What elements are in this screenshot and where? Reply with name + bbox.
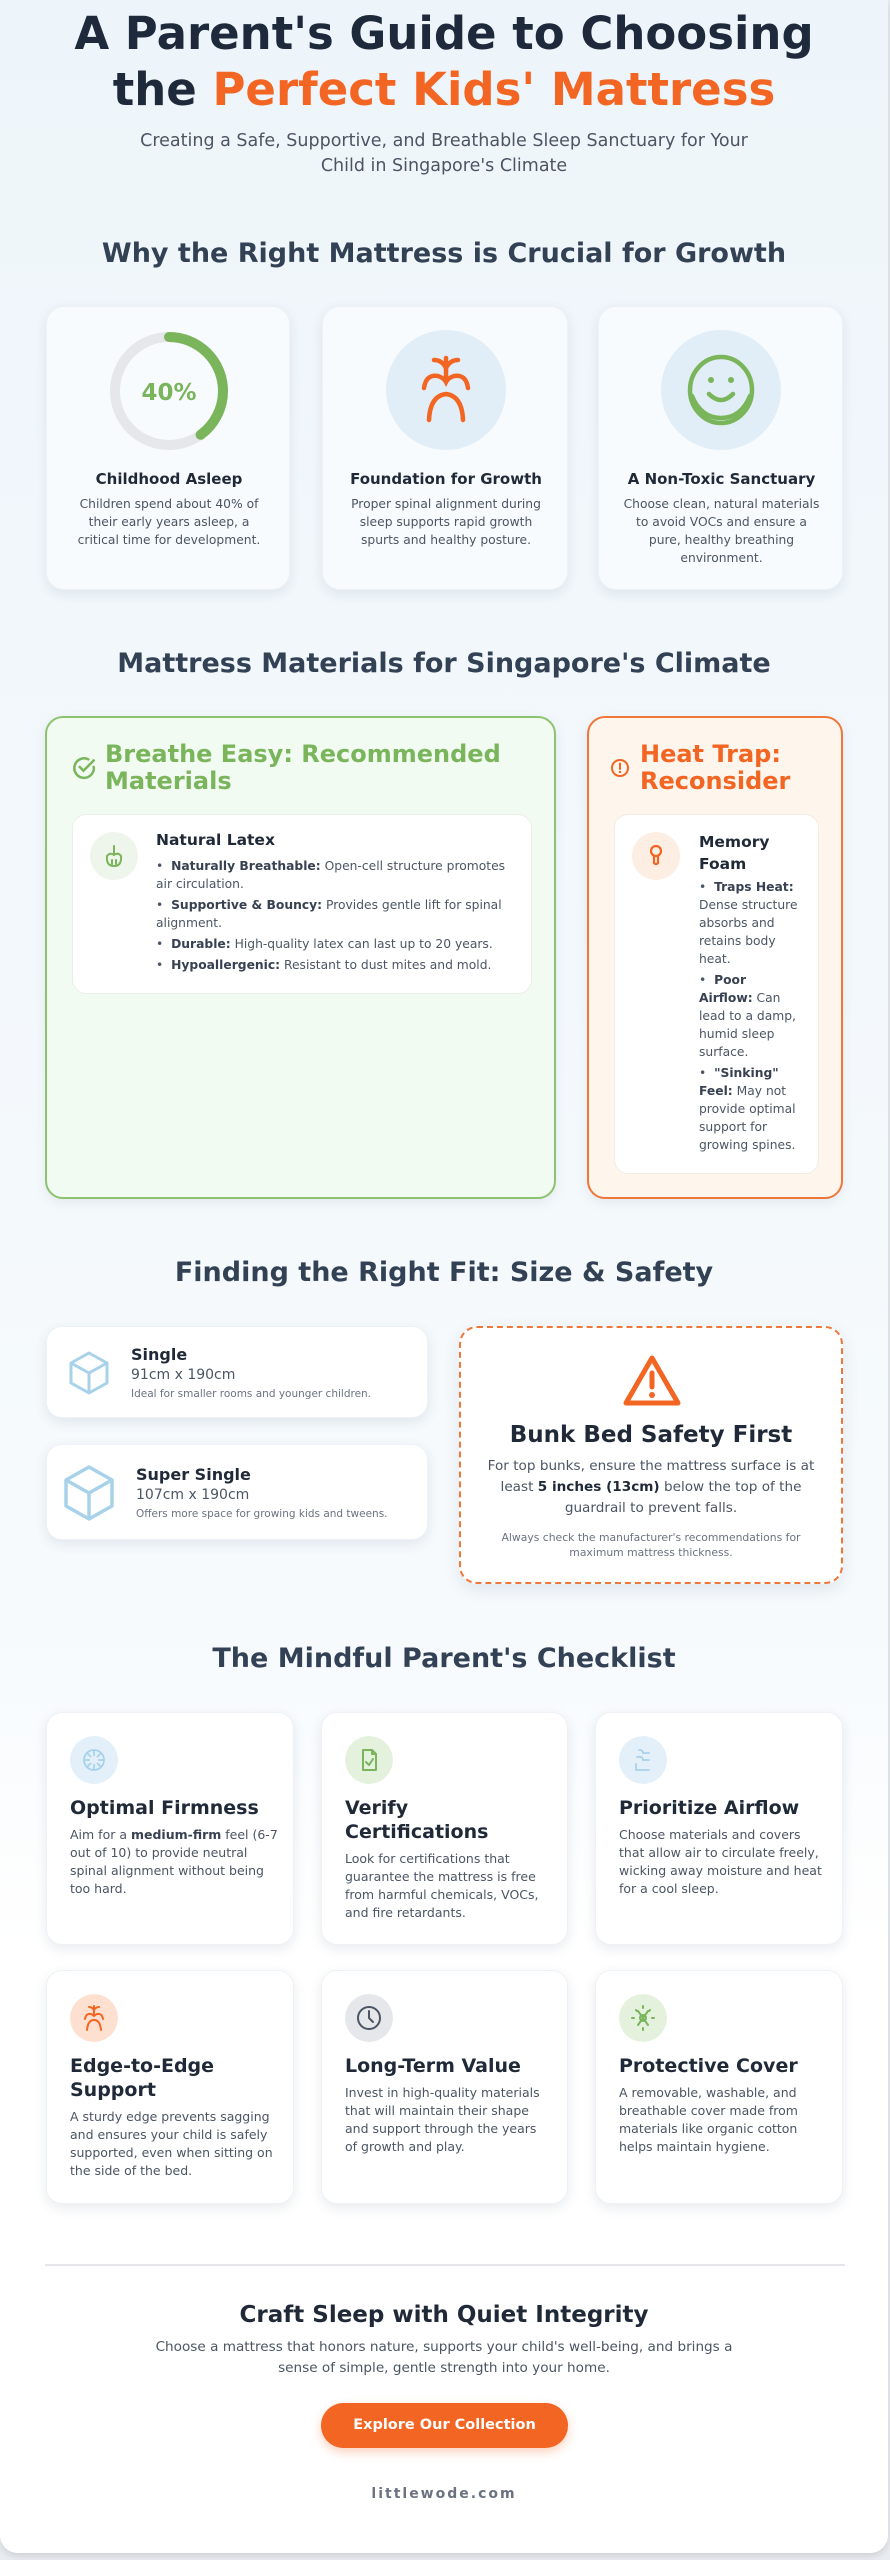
checklist card: airflow — [595, 1712, 843, 1945]
checklist text — [70, 2055, 273, 2178]
bullet list — [156, 859, 505, 972]
callout text: For top bunks, ensure the mattress surface is at least 5 inches (13cm) below the top of the guardrail to prevent falls. — [488, 1458, 814, 1516]
bullet list: • Hypoallergenic: Resistant to dust mites and mold. — [156, 958, 491, 972]
panel heading: Breathe Easy: Recommended Materials — [105, 740, 501, 795]
icon: cube large — [64, 1465, 114, 1521]
size desc: Offers more space for growing kids and tweens. — [136, 1508, 388, 1520]
icon: cube — [70, 1352, 108, 1394]
subtitle: Creating a Safe, Supportive, and Breathable Sleep Sanctuary for Your Child in Singapore's Climate — [140, 131, 748, 176]
icon: check circle — [73, 757, 96, 780]
checklist text: Protective Cover — [619, 2055, 798, 2077]
bullet list: • Supportive & Bouncy: Provides gentle lift for spinal alignment. — [156, 898, 502, 930]
icon: spine small — [70, 1994, 118, 2042]
checklist text: Aim for a medium-firm feel (6-7 out of 10) to provide neutral spinal alignment without being too hard. — [70, 1827, 278, 1896]
bullet list: • Traps Heat: Dense structure absorbs and retains body heat. — [699, 880, 798, 966]
icon: cover — [619, 1994, 667, 2042]
checklist text: A removable, washable, and breathable cover made from materials like organic cotton helps maintain hygiene. — [619, 2085, 798, 2154]
material name: Memory Foam — [699, 833, 769, 873]
title: the Perfect Kids' Mattress — [113, 63, 775, 116]
icon: alert circle — [611, 759, 629, 777]
icon: memory foam — [632, 832, 680, 880]
callout note: Always check the manufacturer's recommendations for maximum mattress thickness. — [502, 1531, 800, 1559]
size desc: Ideal for smaller rooms and younger children. — [131, 1388, 371, 1400]
panel: recommended materials — [45, 716, 556, 1199]
footer heading: Craft Sleep with Quiet Integrity — [240, 2302, 648, 2328]
card title: Foundation for Growth — [350, 470, 542, 488]
bullet list: • Naturally Breathable: Open-cell structure promotes air circulation. — [156, 859, 505, 891]
chart: 40% ring — [110, 332, 228, 450]
panel: non-toxic sanctuary — [598, 306, 843, 590]
size card: super single — [46, 1444, 428, 1540]
material card: natural latex — [72, 814, 532, 994]
footer text: Choose a mattress that honors nature, supports your child's well-being, and brings a sense of simple, gentle strength into your home. — [156, 2339, 732, 2376]
checklist text — [619, 2055, 798, 2154]
button: explore collection — [321, 2403, 568, 2448]
panel: heat trap — [587, 716, 843, 1199]
bullet list — [699, 880, 798, 1152]
bullet list: • Poor Airflow: Can lead to a damp, humid sleep surface. — [699, 973, 796, 1059]
icon: spine — [386, 330, 506, 450]
chart: 40% ring: 40% — [141, 380, 197, 406]
button: explore collection: Explore Our Collection — [353, 2417, 536, 2433]
checklist text: Prioritize Airflow — [619, 1797, 799, 1819]
checklist text: A sturdy edge prevents sagging and ensures your child is safely supported, even when sitting on the side of the bed. — [70, 2109, 273, 2178]
bullet list: • Durable: High-quality latex can last up to 20 years. — [156, 937, 493, 951]
checklist card: certifications — [321, 1712, 568, 1945]
checklist card: protective cover — [595, 1970, 843, 2204]
icon: clock — [345, 1994, 393, 2042]
size card: single — [46, 1326, 428, 1418]
heading: size & safety: Finding the Right Fit: Size & Safety — [175, 1257, 713, 1288]
checklist text: Optimal Firmness — [70, 1797, 259, 1819]
size title: Single — [131, 1345, 187, 1364]
card text: Choose clean, natural materials to avoid VOCs and ensure a pure, healthy breathing environment. — [624, 497, 819, 565]
heading: materials: Mattress Materials for Singapore's Climate — [117, 648, 771, 679]
icon: document check — [345, 1736, 393, 1784]
checklist text: Invest in high-quality materials that will maintain their shape and support through the years of growth and play. — [345, 2085, 540, 2154]
size dims: 107cm x 190cm — [136, 1487, 249, 1503]
checklist text: Look for certifications that guarantee the mattress is free from harmful chemicals, VOCs, and fire retardants. — [345, 1851, 538, 1920]
panel: childhood asleep — [46, 306, 290, 590]
material name: Natural Latex — [156, 831, 275, 849]
section: checklist background — [0, 1617, 888, 2553]
size title: Super Single — [136, 1465, 251, 1484]
checklist text: Edge-to-Edge Support — [70, 2055, 214, 2101]
checklist text — [619, 1797, 822, 1896]
checklist text: Choose materials and covers that allow air to circulate freely, wicking away moisture and heat for a cool sleep. — [619, 1827, 822, 1896]
card title: Childhood Asleep — [96, 470, 242, 488]
icon: smiley — [661, 330, 781, 450]
checklist text: Long-Term Value — [345, 2055, 521, 2077]
heading: why: Why the Right Mattress is Crucial for Growth — [102, 238, 786, 269]
checklist text — [70, 1797, 278, 1896]
panel: foundation for growth — [322, 306, 568, 590]
footer brand: littlewode.com — [371, 2486, 517, 2502]
heading: checklist: The Mindful Parent's Checklist — [212, 1643, 676, 1674]
checklist card: edge support — [46, 1970, 294, 2204]
callout title: Bunk Bed Safety First — [510, 1422, 792, 1448]
checklist card: optimal firmness — [46, 1712, 294, 1945]
panel heading: Heat Trap: Reconsider — [640, 740, 790, 795]
icon: latex — [90, 832, 138, 880]
title — [74, 7, 814, 116]
material card: memory foam — [614, 814, 819, 1174]
checklist text — [345, 1797, 538, 1920]
title: A Parent's Guide to Choosing — [74, 7, 814, 60]
bullet list: • "Sinking" Feel: May not provide optimal support for growing spines. — [699, 1066, 796, 1152]
callout: bunk bed safety — [459, 1326, 843, 1584]
icon: firmness — [70, 1736, 118, 1784]
card title: A Non-Toxic Sanctuary — [628, 470, 815, 488]
checklist card: long-term value — [321, 1970, 568, 2204]
card text: Children spend about 40% of their early years asleep, a critical time for development. — [78, 497, 260, 547]
card text: Proper spinal alignment during sleep supports rapid growth spurts and healthy posture. — [351, 497, 541, 547]
icon: warning triangle — [624, 1356, 680, 1406]
size dims: 91cm x 190cm — [131, 1367, 235, 1383]
icon: airflow — [619, 1736, 667, 1784]
checklist text — [345, 2055, 540, 2154]
checklist text: Verify Certifications — [345, 1797, 488, 1843]
